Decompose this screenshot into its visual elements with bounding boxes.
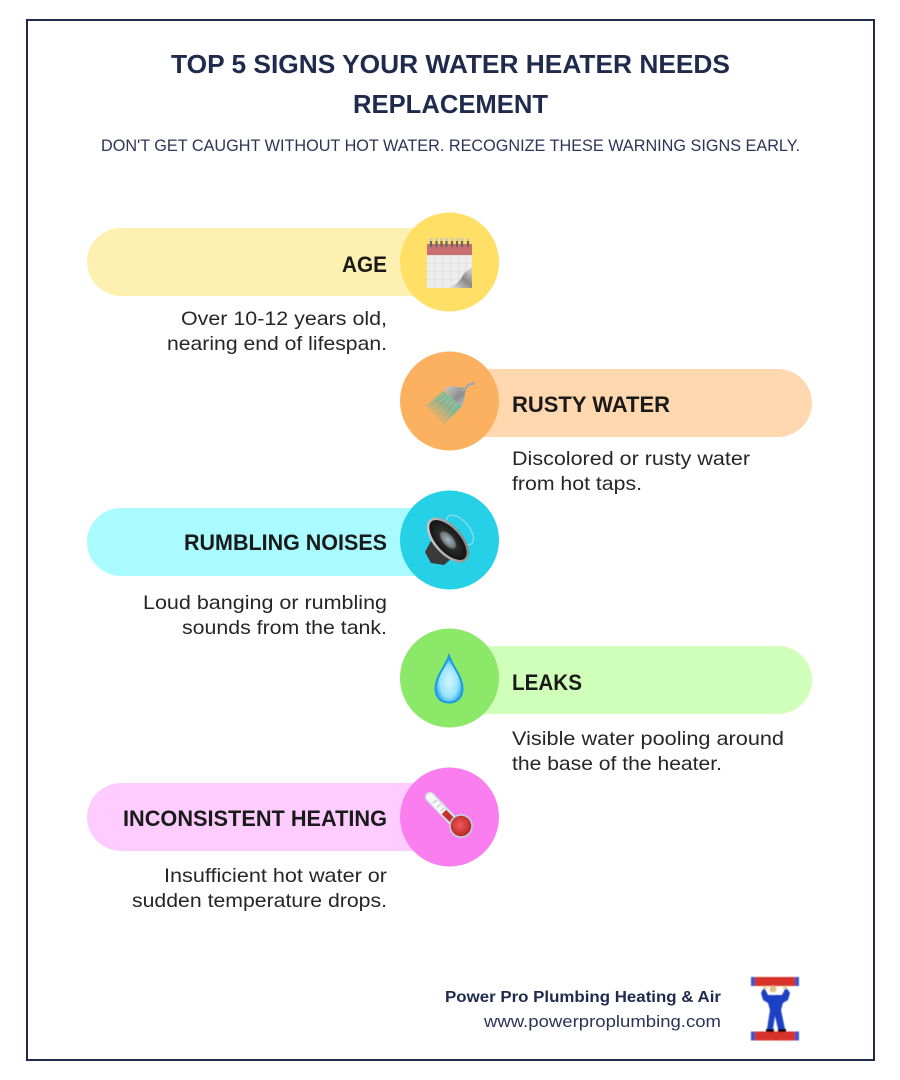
title: TOP 5 SIGNS YOUR WATER HEATER NEEDS xyxy=(171,49,730,79)
rumbling noises circle xyxy=(400,490,499,590)
rumbling noises description: Loud banging or rumbling xyxy=(143,592,387,614)
age circle xyxy=(400,212,499,312)
inconsistent heating heading: INCONSISTENT HEATING xyxy=(123,806,387,831)
panel: leaks xyxy=(400,628,812,775)
title xyxy=(171,49,730,119)
footer company name and website: Power Pro Plumbing Heating & Air xyxy=(445,989,721,1006)
panel: rumbling noises xyxy=(87,490,499,639)
age description: Over 10-12 years old, xyxy=(181,308,387,330)
icon: calendar xyxy=(427,238,472,288)
title: REPLACEMENT xyxy=(353,89,548,119)
rumbling noises description: sounds from the tank. xyxy=(182,617,387,639)
leaks heading: LEAKS xyxy=(512,670,582,695)
rumbling noises pill xyxy=(87,508,450,576)
icon: water drop xyxy=(436,656,462,702)
panel: inconsistent heating xyxy=(87,768,499,912)
rusty water heading: RUSTY WATER xyxy=(512,392,670,417)
leaks pill xyxy=(450,646,812,714)
icon: shower xyxy=(425,384,474,425)
rumbling noises description xyxy=(143,592,387,639)
rusty water description: from hot taps. xyxy=(512,473,642,495)
rusty water circle xyxy=(400,352,499,450)
icon: thermometer xyxy=(430,797,472,837)
panel: rusty water xyxy=(400,352,812,495)
inconsistent heating description: sudden temperature drops. xyxy=(132,890,387,912)
footer company name and website xyxy=(445,989,721,1031)
rusty water description xyxy=(512,448,751,495)
age pill xyxy=(87,228,450,296)
icon: company logo xyxy=(751,977,799,1040)
leaks circle xyxy=(400,628,499,728)
leaks description xyxy=(512,728,784,775)
inconsistent heating circle xyxy=(400,768,499,866)
age description: nearing end of lifespan. xyxy=(167,333,387,355)
age description xyxy=(167,308,387,355)
panel: age xyxy=(87,212,499,355)
footer company name and website: www.powerproplumbing.com xyxy=(483,1012,721,1031)
rusty water description: Discolored or rusty water xyxy=(512,448,751,470)
leaks description: Visible water pooling around xyxy=(512,728,784,750)
rumbling noises heading: RUMBLING NOISES xyxy=(184,530,387,555)
age heading: AGE xyxy=(342,252,387,277)
leaks description: the base of the heater. xyxy=(512,753,722,775)
rusty water pill xyxy=(450,369,812,437)
subtitle: DON'T GET CAUGHT WITHOUT HOT WATER. RECOGNIZE THESE WARNING SIGNS EARLY. xyxy=(101,137,800,155)
icon: speaker xyxy=(421,510,478,568)
inconsistent heating description: Insufficient hot water or xyxy=(164,865,388,887)
inconsistent heating pill xyxy=(87,783,450,851)
inconsistent heating description xyxy=(132,865,388,912)
